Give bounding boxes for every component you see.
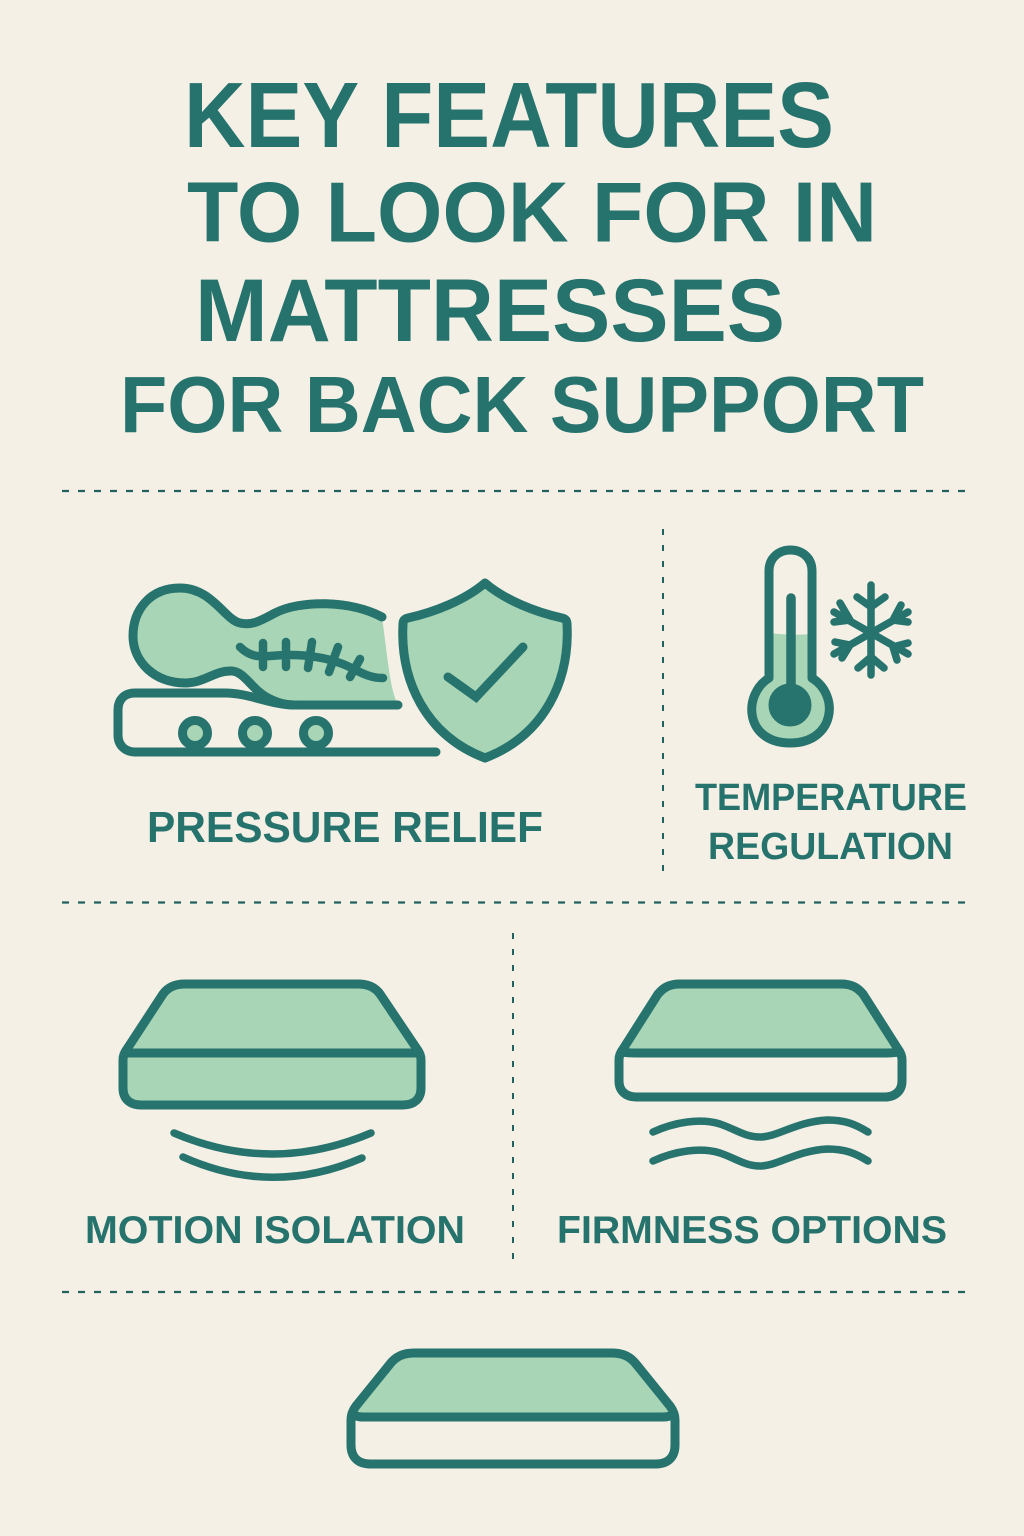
label: temperature regulation	[695, 777, 967, 868]
label: temperature regulation: TEMPERATURE	[695, 777, 967, 819]
title: MATTRESSES	[195, 260, 785, 360]
title: FOR BACK SUPPORT	[120, 360, 924, 449]
firmness waves	[653, 1120, 868, 1166]
label: temperature regulation: REGULATION	[708, 826, 953, 868]
mattress	[123, 984, 421, 1105]
label: firmness options: FIRMNESS OPTIONS	[557, 1209, 947, 1252]
motion waves	[174, 1133, 371, 1177]
icon: pressure relief	[118, 583, 567, 758]
icon: motion isolation	[123, 984, 421, 1177]
icon: thermometer	[752, 550, 829, 743]
icon: firmness options	[619, 984, 902, 1166]
pillow	[133, 588, 398, 705]
mattress base	[118, 693, 436, 752]
icon: mattress	[351, 1353, 675, 1464]
label: pressure relief: PRESSURE RELIEF	[147, 803, 543, 852]
mattress	[619, 984, 902, 1097]
title	[120, 63, 924, 449]
title: KEY FEATURES	[184, 63, 834, 167]
icon: snowflake	[834, 585, 908, 675]
shield with check	[403, 583, 567, 758]
title: TO LOOK FOR IN	[187, 166, 877, 260]
label: motion isolation: MOTION ISOLATION	[85, 1209, 465, 1252]
